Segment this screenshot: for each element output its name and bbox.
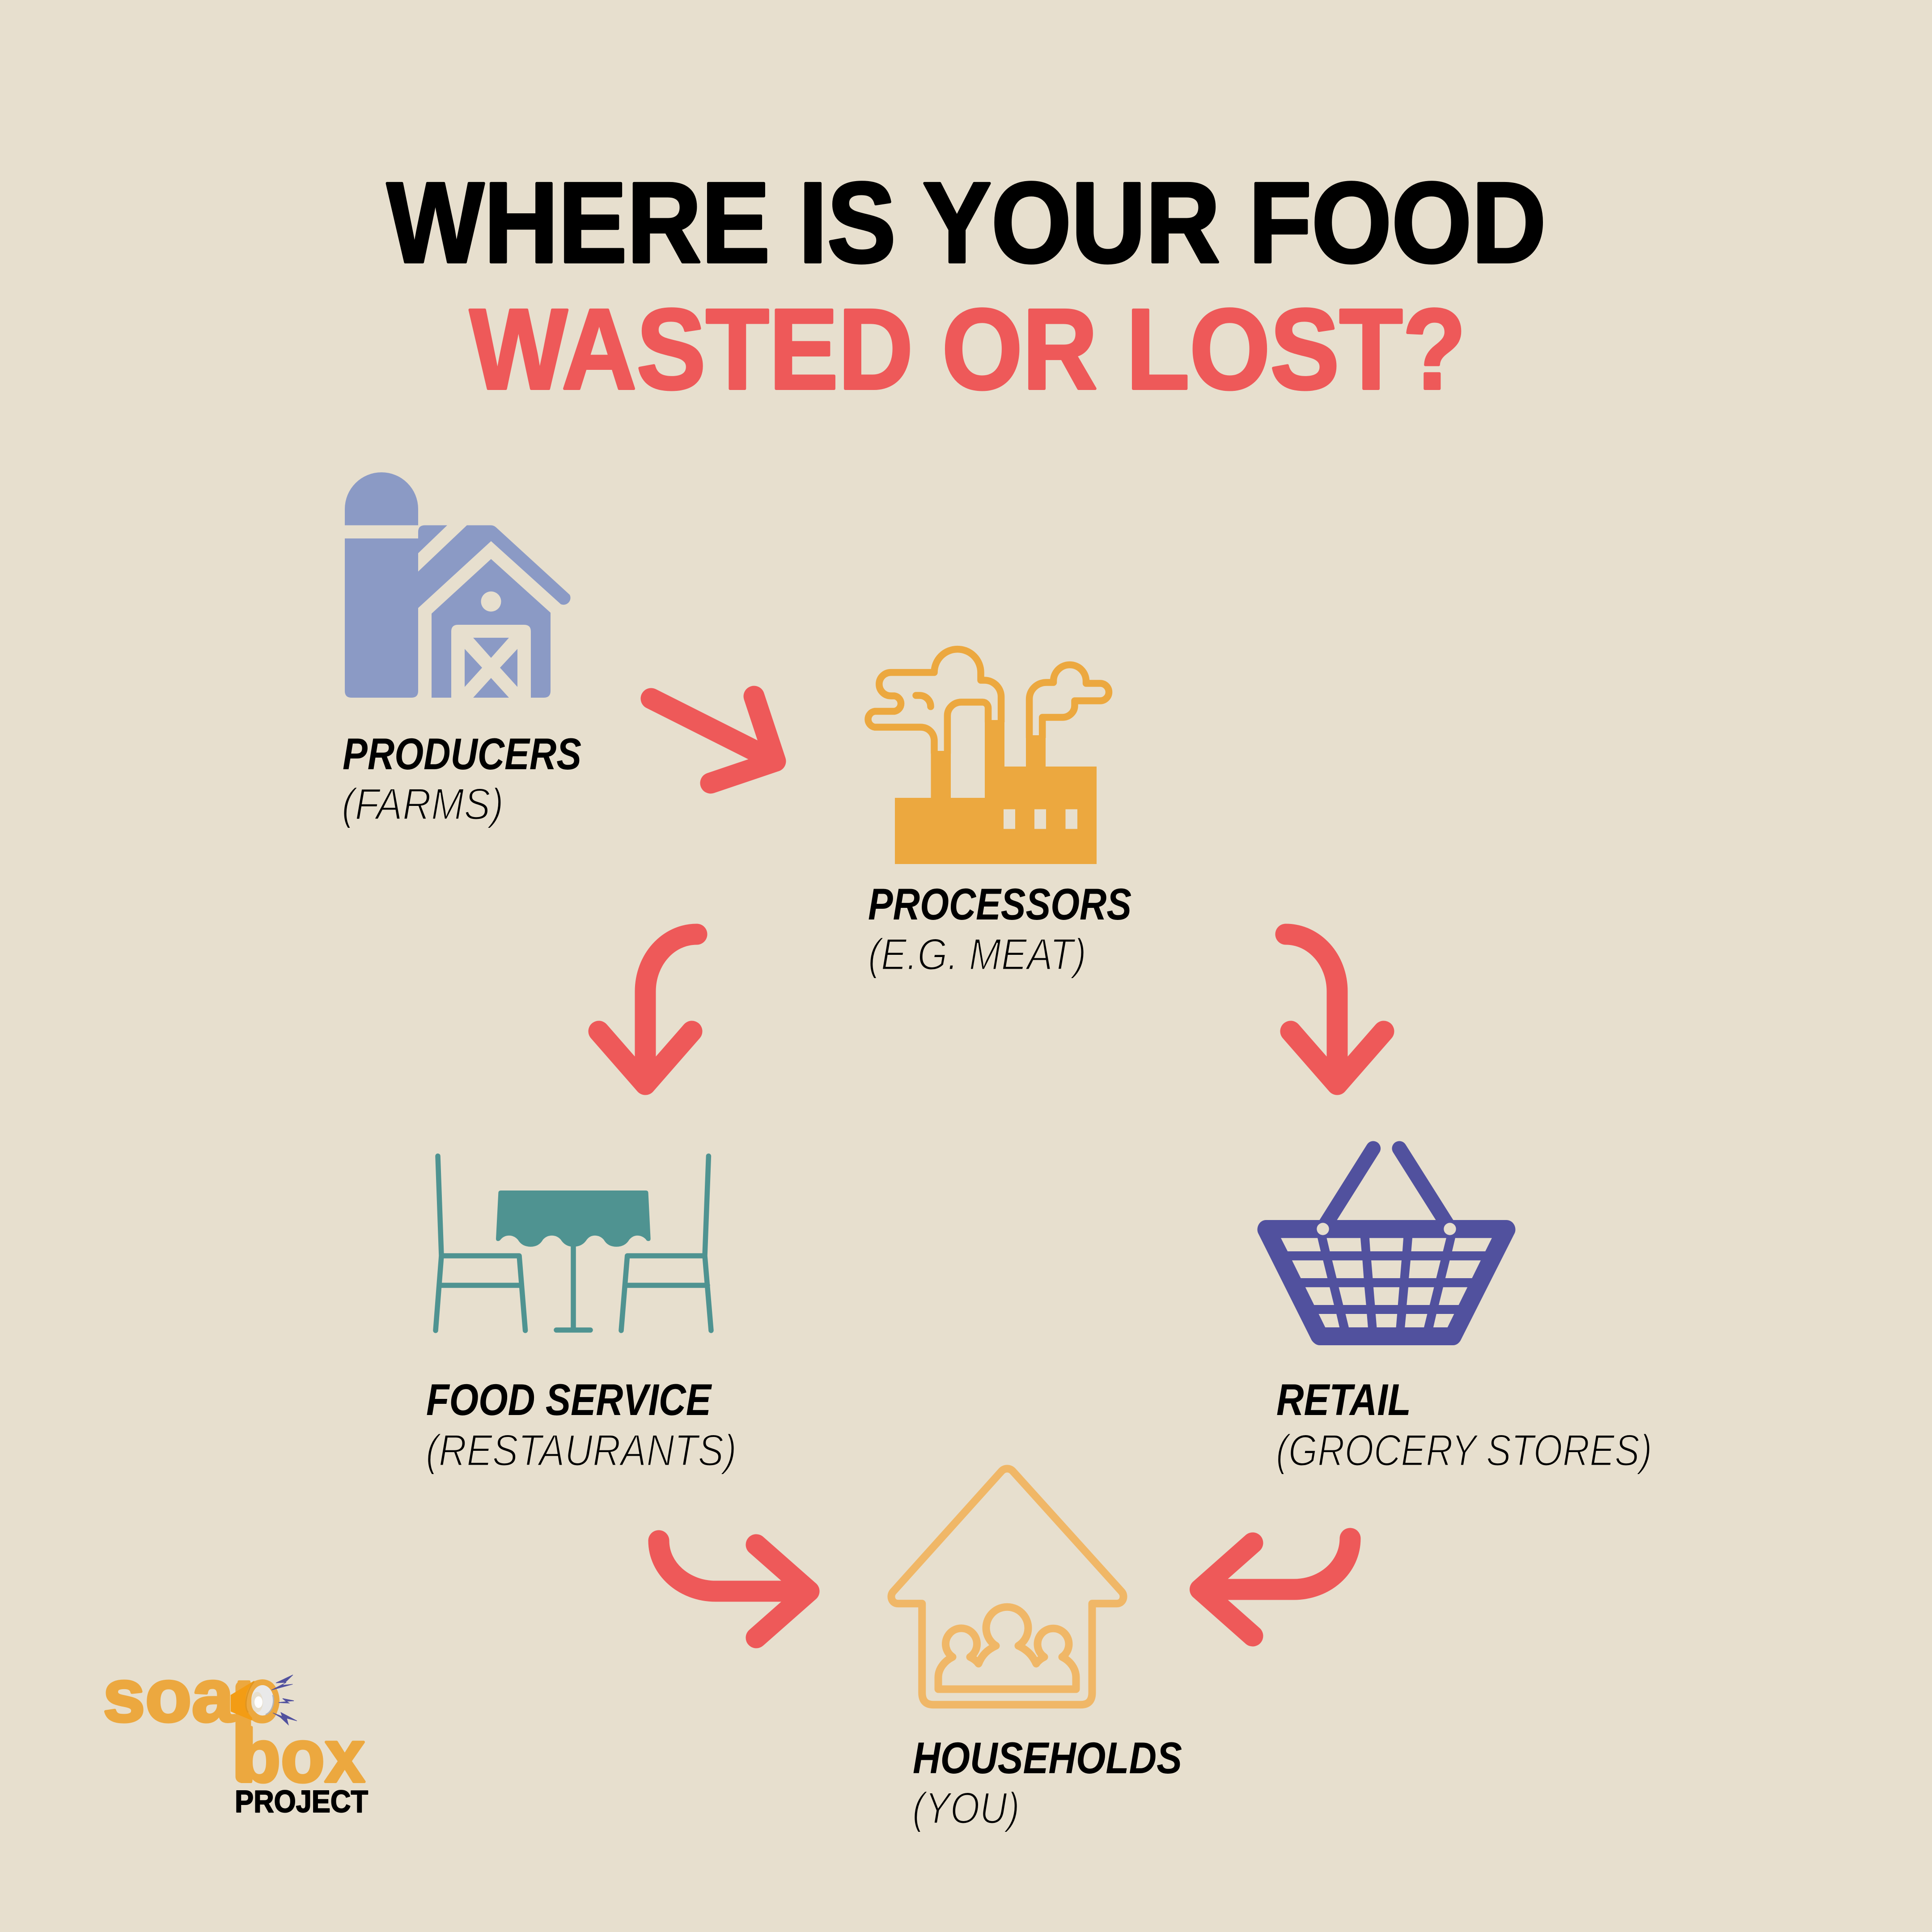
icon: table and chairs	[436, 1156, 711, 1330]
producers name: PRODUCERS	[343, 729, 581, 779]
icon: shopping basket	[1258, 1148, 1515, 1345]
arrow: food service to households	[659, 1541, 809, 1638]
households detail: (YOU)	[912, 1783, 1020, 1833]
processors name: PROCESSORS	[868, 879, 1131, 929]
label: food service	[426, 1375, 737, 1475]
title	[387, 159, 1546, 413]
retail detail: (GROCERY STORES)	[1276, 1425, 1652, 1475]
retail name: RETAIL	[1276, 1375, 1411, 1424]
arrow: producers to processors	[651, 696, 775, 783]
arrow: retail to households	[1200, 1538, 1350, 1636]
logo word project: PROJECT	[235, 1784, 368, 1819]
title line 1: WHERE IS YOUR FOOD	[387, 159, 1546, 287]
logo: soapbox project	[103, 1653, 368, 1819]
label: retail	[1276, 1375, 1652, 1475]
households name: HOUSEHOLDS	[913, 1733, 1182, 1783]
arrow: processors to food service	[599, 934, 697, 1085]
producers detail: (FARMS)	[342, 779, 504, 829]
icon: factory	[868, 649, 1109, 864]
house outline	[891, 1469, 1123, 1705]
family silhouette	[938, 1607, 1076, 1689]
icon: barn and silo	[345, 472, 571, 698]
logo megaphone	[231, 1675, 297, 1725]
title line 2: WASTED OR LOST?	[470, 285, 1466, 413]
arrow: processors to retail	[1286, 934, 1384, 1085]
logo word box: box	[237, 1714, 365, 1798]
icon: house with family	[891, 1469, 1123, 1705]
label: producers	[342, 729, 581, 829]
food service name: FOOD SERVICE	[426, 1375, 712, 1424]
label: households	[912, 1733, 1182, 1833]
food service detail: (RESTAURANTS)	[426, 1425, 737, 1475]
processors detail: (E.G. MEAT)	[868, 929, 1086, 979]
logo word soap: soap	[103, 1653, 280, 1737]
label: processors	[868, 879, 1131, 979]
